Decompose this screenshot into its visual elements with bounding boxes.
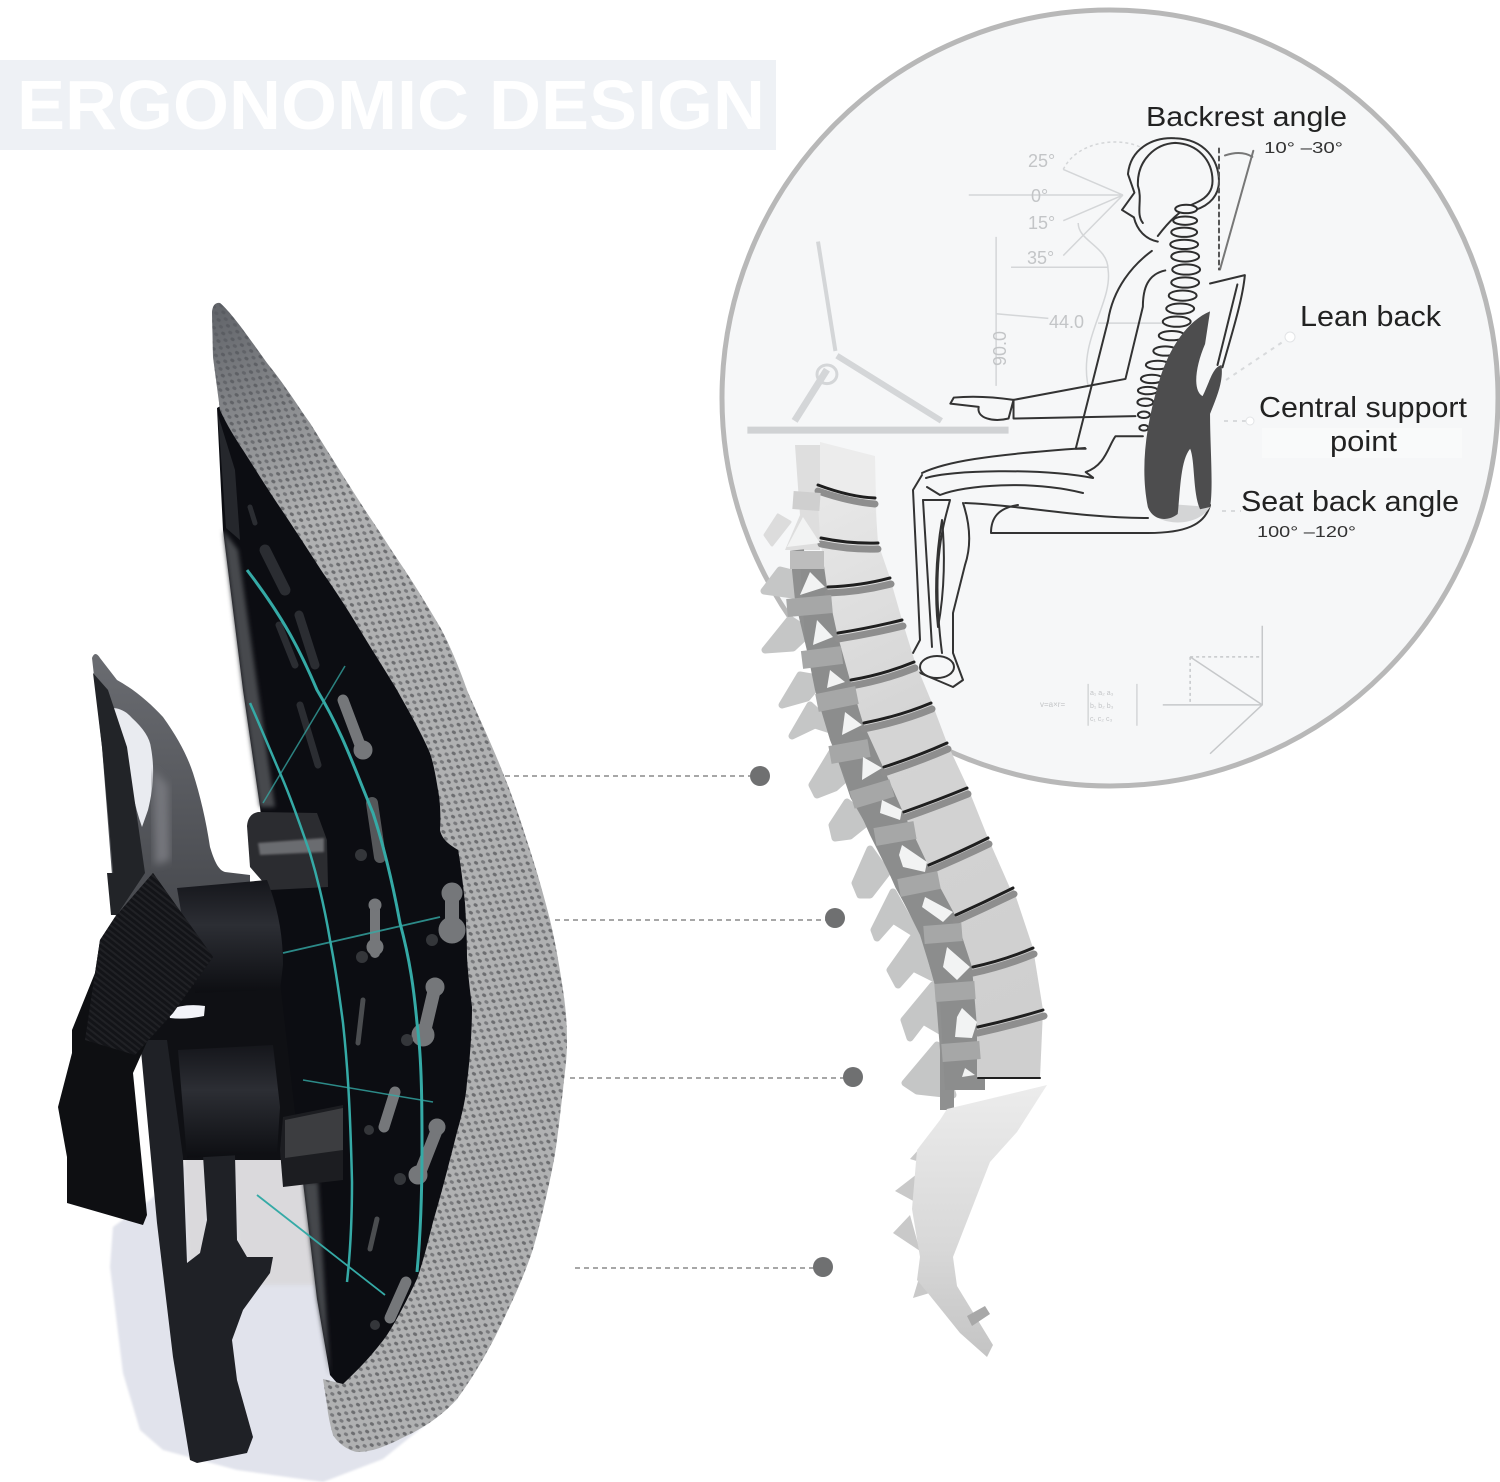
faded angle labels (990, 151, 1114, 723)
leader 1 (505, 766, 770, 786)
head outline (1122, 138, 1219, 242)
dark frame body between cylinders (135, 985, 300, 1160)
neural arch column (797, 550, 947, 1110)
callout: seat back angle: Seat back angle (1241, 486, 1459, 518)
lower cylinder (178, 1045, 280, 1158)
lumbar cushion silhouette (1144, 311, 1222, 522)
floor shadow (110, 1150, 457, 1482)
spinous processes (764, 515, 953, 1095)
faded angle labels: 44.0 (1049, 312, 1084, 332)
panel: sitting posture circle (722, 10, 1498, 786)
seated spine column (1137, 205, 1200, 431)
black plate (217, 405, 480, 1392)
chair back frame (1210, 275, 1245, 367)
lower mounting block (280, 1105, 343, 1187)
grey backing between column and bodies (800, 560, 985, 1090)
spine illustration (764, 442, 1047, 1357)
title banner: ERGONOMIC DESIGN (17, 66, 765, 144)
sacrum (893, 1085, 1047, 1357)
leader 3 (570, 1067, 863, 1087)
pedicle bars (787, 500, 980, 1053)
faded angle labels: b₁ b₂ b₃ (1090, 703, 1114, 710)
faded angle labels: c₁ c₂ c₃ (1090, 716, 1112, 723)
rear frame lower and foot (140, 1040, 273, 1463)
callout: lean back: Lean back (1300, 301, 1442, 333)
thigh (922, 448, 1085, 473)
callout: lean back (1226, 301, 1442, 380)
faded angle labels: 0° (1031, 186, 1048, 206)
callout: seat back angle: 100° –120° (1257, 524, 1356, 541)
callout: seat back angle (1222, 486, 1459, 541)
faded angle labels: 25° (1028, 151, 1055, 171)
foramen gaps (787, 517, 977, 1077)
callout: central support point (1224, 392, 1467, 458)
plate small pegs (355, 849, 438, 1330)
lumbar support product (58, 303, 567, 1482)
lower leg (913, 475, 922, 653)
faded angle labels: 15° (1028, 213, 1055, 233)
seat pan (991, 505, 1210, 533)
rear frame upper (92, 654, 250, 1000)
upper faded vertebrae (820, 442, 877, 545)
leader 2 (555, 908, 845, 928)
callout: central support point: Central support (1259, 392, 1467, 424)
seated skeleton line drawing (913, 138, 1253, 687)
faded angle labels: v=a×r= (1040, 700, 1065, 709)
vertebral bodies (817, 485, 1043, 1078)
pale upper neural arches (785, 445, 820, 550)
faded desk, laptop and measurement drawing (747, 142, 1262, 754)
faded angle labels: 90.0 (990, 331, 1010, 366)
faded angle labels: a₁ a₂ a₃ (1090, 690, 1114, 697)
mesh cover (212, 303, 567, 1452)
white gap in frame (168, 1005, 205, 1019)
elastic strap (58, 873, 213, 1225)
intervertebral disc bands (818, 491, 1044, 1033)
callout: backrest angle: 10° –30° (1264, 140, 1343, 157)
leader lines with dots (505, 766, 863, 1277)
intervertebral disc lines (818, 485, 1043, 1078)
buttock (1086, 436, 1143, 478)
faded angle labels: 35° (1027, 248, 1054, 268)
callout: central support point: point (1330, 426, 1397, 458)
leader 4 (575, 1257, 833, 1277)
callout: backrest angle: Backrest angle (1146, 101, 1347, 132)
backrest angle guide (1220, 151, 1253, 270)
backdrop gaps between frame and plate (183, 1150, 320, 1285)
upper mounting block (247, 812, 328, 890)
circle background (722, 10, 1498, 786)
plate vent slots (250, 507, 318, 765)
callout: backrest angle (1146, 101, 1347, 157)
plate peanut openings (343, 700, 465, 1318)
upper cylinder (177, 880, 283, 993)
teal support curves (247, 570, 440, 1295)
torso and arm (1076, 251, 1152, 449)
